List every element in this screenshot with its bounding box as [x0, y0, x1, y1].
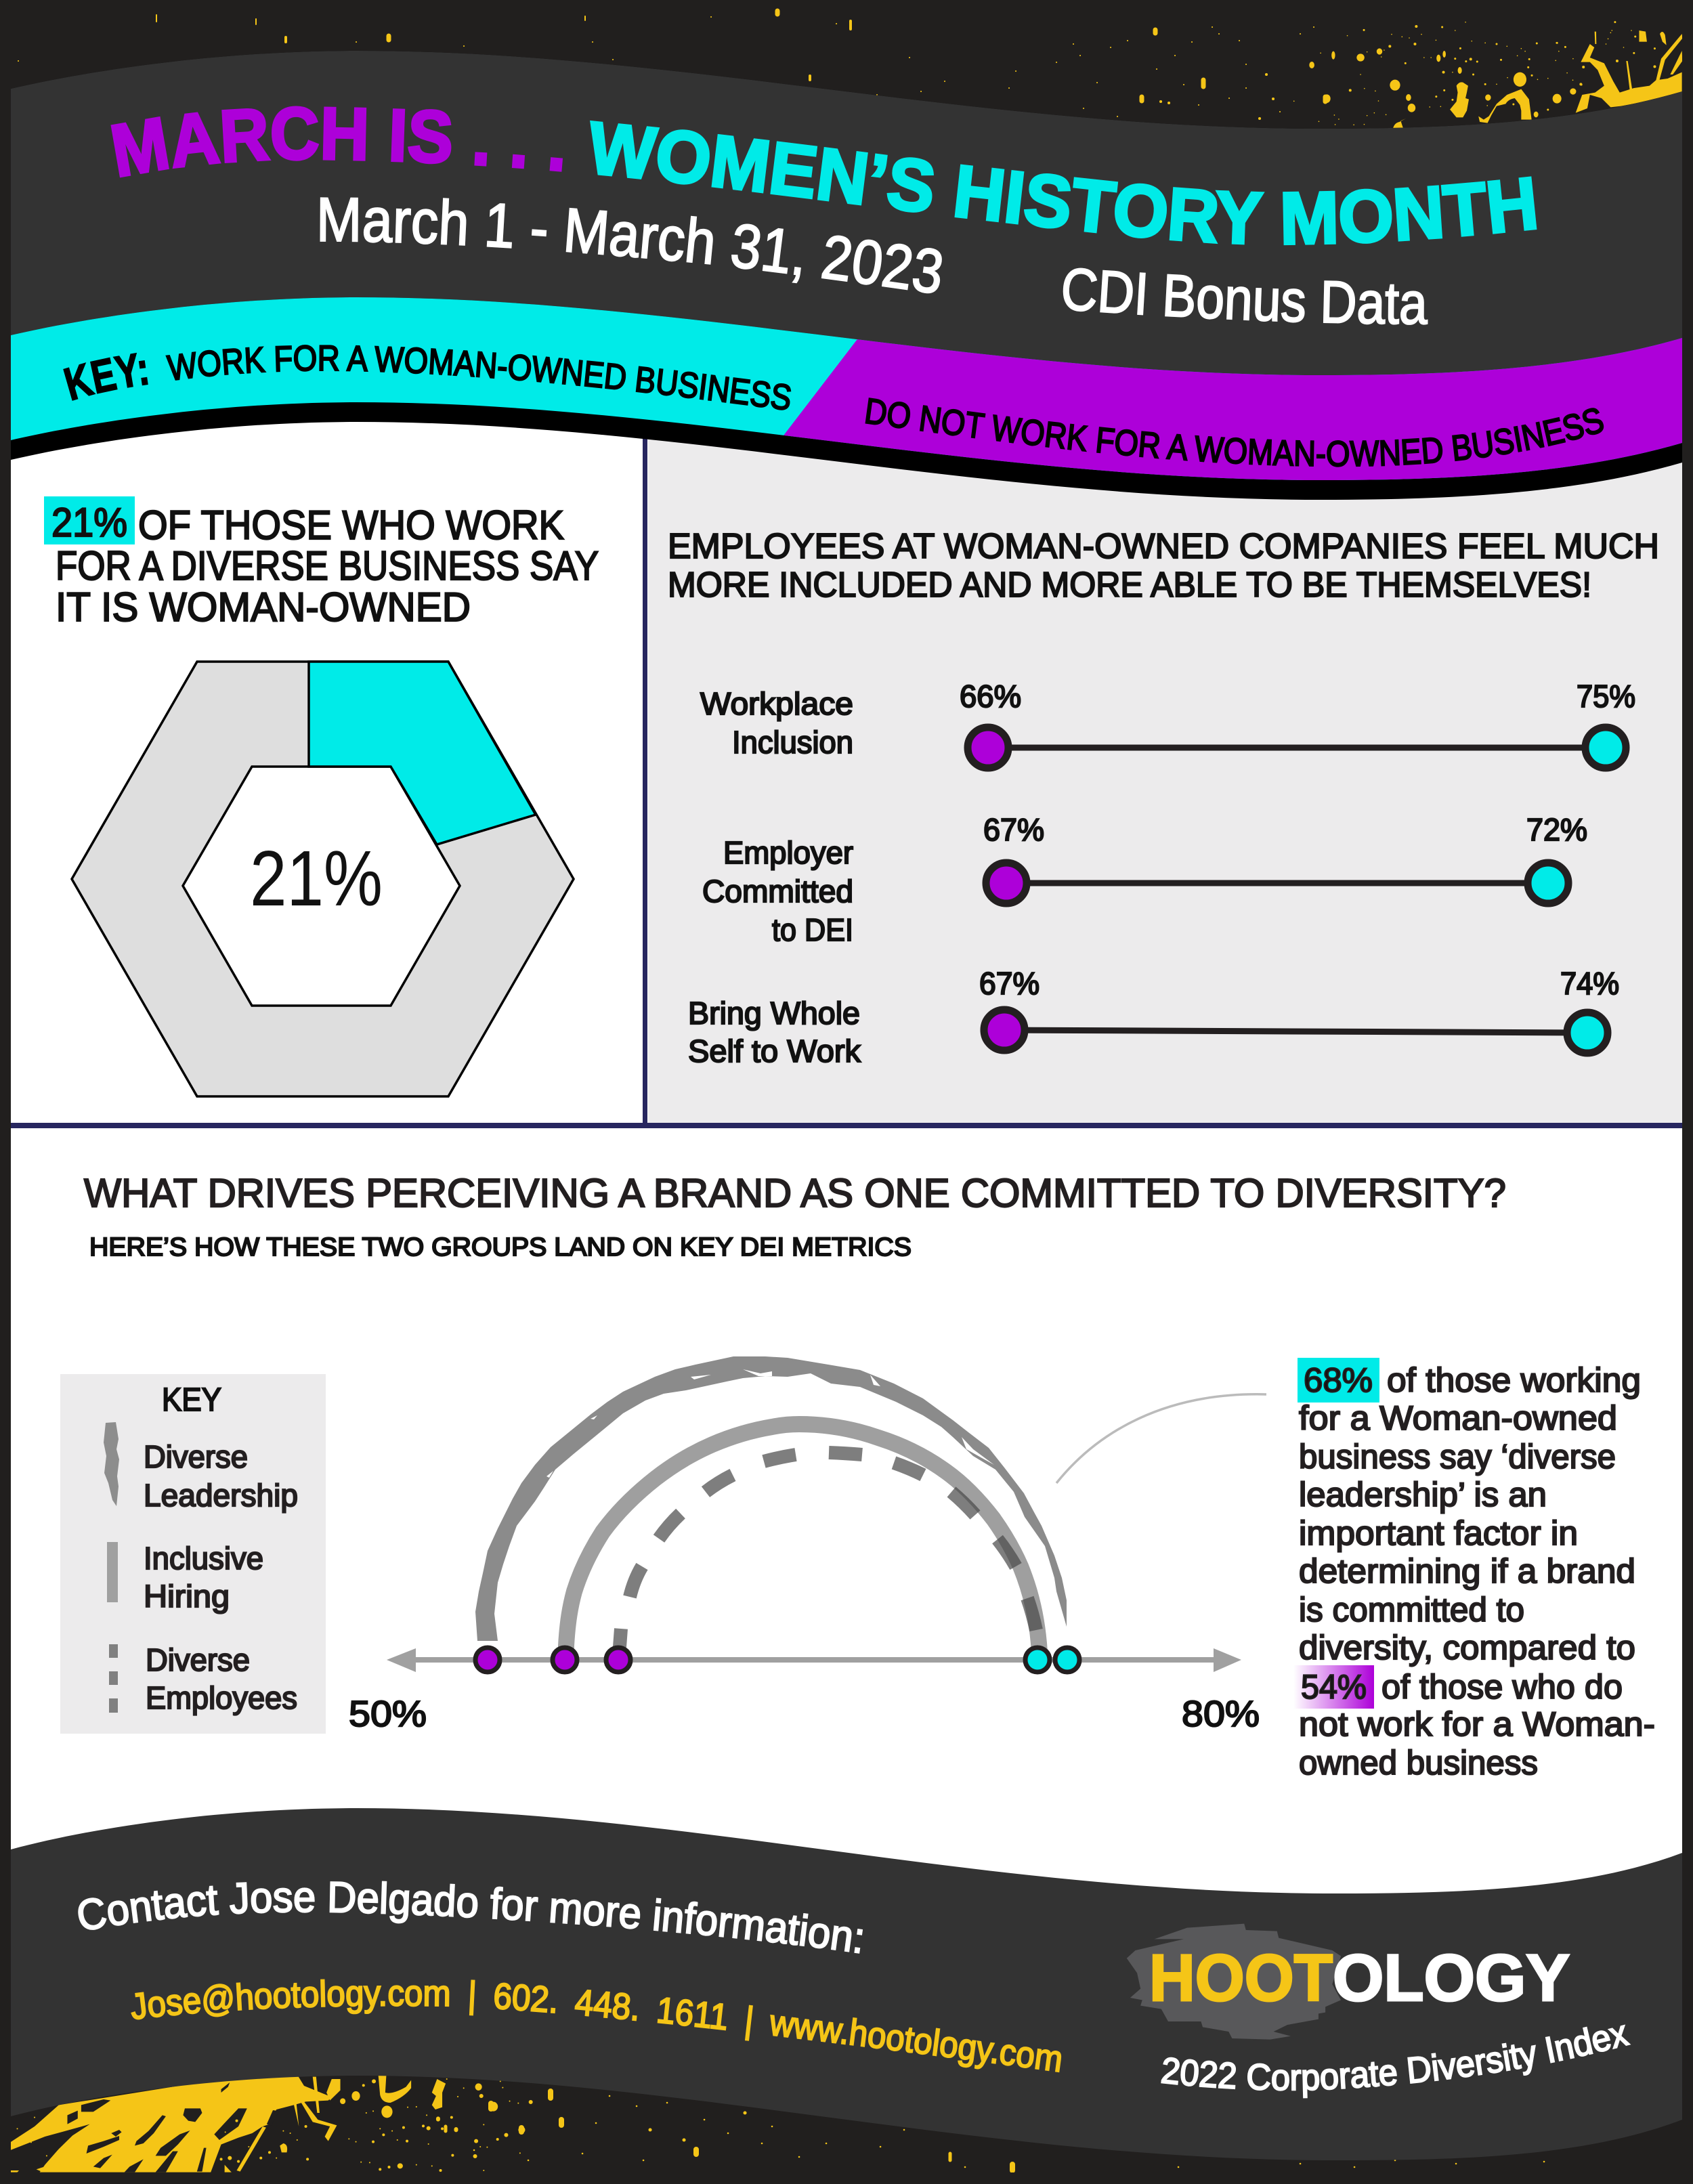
legend: diverse leadership [104, 1422, 298, 1513]
arc: diverse leadership (rough brush) [475, 1356, 1067, 1641]
row: bring whole self to work: 67% [979, 966, 1040, 1001]
row: employer committed to DEI: Employer [723, 835, 853, 870]
axis points: woman-owned [1025, 1648, 1079, 1672]
axis arrow [387, 1648, 1241, 1672]
black wave strip [11, 51, 1682, 500]
divider: vertical navy rule [643, 406, 647, 1128]
callout text: 68% vs 54%: 68% [1304, 1361, 1373, 1399]
chart legend [60, 1374, 326, 1734]
hexagon donut chart [72, 662, 574, 1096]
callout text: 68% vs 54%: leadership’ is an [1299, 1476, 1547, 1514]
paint splatter: bottom left [10, 2074, 1656, 2172]
key: do not work for a woman-owned business: DO NOT WORK FOR A WOMAN-OWNED BUSINESS [865, 398, 1604, 467]
callout text: 68% vs 54%: determining if a brand [1299, 1552, 1635, 1590]
highlight: 21% [44, 496, 135, 544]
comparison heading: MORE INCLUDED AND MORE ABLE TO BE THEMSELVES! [668, 565, 1591, 605]
logo: brush mark [1127, 1924, 1341, 2040]
legend: diverse leadership: Diverse [144, 1439, 248, 1474]
legend: diverse leadership: Leadership [144, 1478, 298, 1513]
callout connector line [1056, 1394, 1266, 1483]
callout text: 68% vs 54%: owned business [1299, 1744, 1538, 1782]
key label: KEY: [63, 352, 148, 401]
callout text: 68% vs 54%: diversity, compared to [1299, 1629, 1635, 1667]
arc: diverse employees (dashed) [620, 1453, 1036, 1647]
highlight: 54% [1293, 1665, 1374, 1709]
divider: horizontal navy rule [11, 1123, 1682, 1128]
legend: diverse employees [109, 1642, 297, 1715]
axis label: 80%: 80% [1182, 1694, 1260, 1734]
row: workplace inclusion: Workplace [700, 686, 853, 721]
row: workplace inclusion [700, 679, 1635, 768]
scattered bottom dots [446, 2091, 1656, 2170]
panel: right grey comparison background [648, 406, 1682, 1123]
stat heading [44, 496, 599, 630]
subtitle: CDI Bonus Data: CDI Bonus Data [1063, 268, 1428, 325]
footer: contact details: Jose@hootology.com | 602. 448. 1611 | www.hootology.com [131, 1979, 1062, 2072]
key: work for a woman-owned business: WORK FOR A WOMAN-OWNED BUSINESS [165, 345, 791, 410]
callout text: 68% vs 54%: 54% [1301, 1668, 1367, 1706]
row: employer committed to DEI: Committed [702, 874, 853, 909]
legend: inclusive hiring: Hiring [144, 1579, 230, 1614]
stat heading: FOR A DIVERSE BUSINESS SAY [56, 543, 599, 588]
axis points: not woman-owned [475, 1648, 630, 1672]
hexagon: cyan 21% slice [309, 662, 536, 844]
highlight: 68% [1298, 1358, 1379, 1403]
comparison heading: EMPLOYEES AT WOMAN-OWNED COMPANIES FEEL MUCH [668, 527, 1659, 566]
date range: March 1 - March 31, 2023 [320, 197, 942, 294]
logo: Hootology [1127, 1924, 1570, 2040]
key band: purple segment [784, 338, 1682, 480]
callout text: 68% vs 54%: important factor in [1299, 1514, 1578, 1552]
callout text: 68% vs 54%: of those who do [1381, 1668, 1623, 1706]
stat heading: IT IS WOMAN-OWNED [56, 584, 471, 630]
footer wave band [11, 1808, 1682, 2160]
panel: inclusion comparison [668, 527, 1659, 1069]
row: bring whole self to work [688, 966, 1619, 1069]
row: employer committed to DEI: to DEI [772, 912, 853, 947]
callout text: 68% vs 54%: business say ‘diverse [1299, 1438, 1616, 1476]
callout text: 68% vs 54%: for a Woman-owned [1299, 1399, 1617, 1437]
stat heading: 21% [51, 500, 127, 545]
row: employer committed to DEI: 67% [983, 812, 1044, 847]
scattered top dots [18, 11, 1325, 119]
panel: 21% woman-owned stat [44, 496, 599, 1096]
logo: Hootology: OLOGY [1333, 1941, 1570, 2015]
title: Women's History Month: WOMEN’S HISTORY MONTH [590, 121, 1537, 245]
callout text: 68% vs 54%: is committed to [1299, 1591, 1524, 1629]
row: employer committed to DEI [702, 812, 1587, 947]
key band [11, 297, 1682, 480]
axis label: 50%: 50% [349, 1694, 427, 1734]
row: employer committed to DEI: 72% [1526, 812, 1587, 847]
arc: inclusive hiring (solid) [566, 1424, 1040, 1652]
legend: inclusive hiring: Inclusive [144, 1541, 263, 1576]
row: workplace inclusion: 75% [1577, 679, 1635, 714]
row: bring whole self to work: Self to Work [688, 1033, 861, 1069]
callout text: 68% vs 54% [1293, 1358, 1655, 1782]
footer: 2022 Corporate Diversity Index: 2022 Corporate Diversity Index [1161, 2025, 1631, 2098]
header wave band [11, 51, 1682, 375]
logo: wordmark: HOOT [1149, 1941, 1333, 2015]
paint splatter: top right [18, 11, 1682, 129]
footer: contact heading: Contact Jose Delgado for more information: [78, 1881, 863, 1954]
panel: left white stat panel background [11, 406, 1682, 1917]
row: bring whole self to work: 74% [1560, 966, 1619, 1001]
hexagon centre value: 21% [250, 834, 383, 922]
legend: diverse employees: Employees [146, 1680, 297, 1715]
comparison heading [668, 527, 1659, 605]
key band: cyan segment [11, 297, 1682, 480]
legend: inclusive hiring [107, 1541, 263, 1614]
section heading: what drives perceiving a brand: WHAT DRIVES PERCEIVING A BRAND AS ONE COMMITTED TO DIVERSITY? [84, 1171, 1506, 1216]
arc chart [349, 1356, 1260, 1734]
section subheading: HERE’S HOW THESE TWO GROUPS LAND ON KEY DEI METRICS [89, 1233, 912, 1262]
stat heading: OF THOSE WHO WORK [138, 502, 564, 548]
title: March is: MARCH IS . . . [111, 106, 563, 177]
legend title: KEY [162, 1382, 221, 1418]
row: workplace inclusion: 66% [960, 679, 1021, 714]
row: workplace inclusion: Inclusion [732, 725, 853, 760]
row: bring whole self to work: Bring Whole [688, 995, 860, 1031]
legend: diverse employees: Diverse [146, 1642, 250, 1677]
callout text: 68% vs 54%: not work for a Woman- [1299, 1705, 1655, 1743]
callout text: 68% vs 54%: of those working [1387, 1361, 1641, 1399]
